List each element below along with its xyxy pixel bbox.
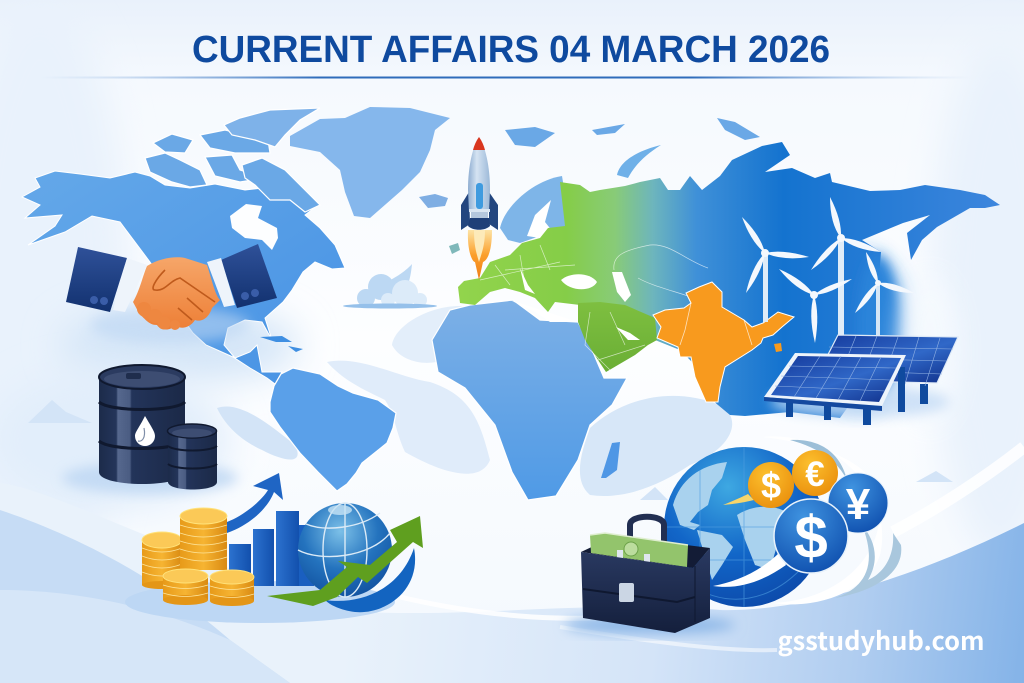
British Isles [449, 243, 460, 254]
icon: wind turbines [742, 197, 914, 343]
coin stacks [142, 508, 254, 606]
turbine middle [779, 269, 852, 343]
Novaya Zemlya [617, 145, 661, 178]
Arabia and the Middle East [578, 302, 657, 372]
bottom waves [0, 447, 1024, 683]
Eurasia [458, 142, 1000, 418]
bar chart [229, 511, 314, 586]
icon: rocket [461, 137, 498, 280]
swooshes [763, 436, 882, 604]
Africa [432, 300, 627, 500]
India region [653, 282, 794, 402]
blur seam over east Asia [858, 255, 898, 395]
dollar coin blue: $ [794, 504, 828, 571]
globe [298, 503, 415, 612]
Arctic Russia islands [505, 118, 760, 147]
Sri Lanka [774, 343, 782, 352]
turbine 2 [811, 197, 881, 335]
dollar coin orange: $ [761, 465, 781, 506]
icon: solar panels [764, 335, 958, 425]
euro coin: € [805, 455, 825, 494]
world globe [664, 447, 824, 607]
white swoosh [713, 552, 786, 587]
yen coin: ¥ [846, 480, 871, 529]
world map [22, 107, 1000, 500]
small barrel [168, 424, 217, 490]
turbine 4 [855, 252, 914, 337]
icon: coins, growth chart and globe [125, 473, 423, 623]
inner seas [510, 268, 640, 340]
green arrow [267, 516, 423, 606]
icon: handshake [66, 244, 277, 343]
icon: oil barrels [62, 365, 238, 494]
turbine 1 [742, 217, 809, 322]
North America [22, 171, 345, 384]
title: CURRENT AFFAIRS 04 MARCH 2026 [192, 29, 830, 71]
South America [270, 368, 396, 491]
Madagascar [601, 442, 620, 478]
Iceland [419, 194, 448, 208]
briefcase [565, 517, 735, 635]
Greenland [290, 107, 450, 218]
yen coin [828, 473, 888, 533]
Caribbean islands [260, 336, 303, 352]
website label: gsstudyhub.com [778, 622, 984, 658]
blurred east Asia [815, 255, 905, 405]
front panel [764, 353, 906, 425]
large barrel [99, 365, 185, 484]
title rule [40, 76, 970, 78]
cloud [343, 264, 437, 308]
icon: globe with currency coins and briefcase [565, 436, 901, 635]
rising blue arrow [227, 473, 283, 533]
dollar coin orange [748, 462, 794, 508]
country borders [480, 245, 708, 370]
Scandinavia and northern Europe [500, 176, 570, 243]
dollar coin blue [774, 499, 848, 573]
India inner borders [680, 303, 752, 345]
euro coin [792, 450, 838, 496]
fade on the right of the map [900, 275, 960, 425]
Baltic Sea [527, 200, 553, 238]
back panel [815, 335, 958, 404]
pale ocean patches [28, 306, 953, 500]
Arctic islands [145, 108, 320, 212]
Hudson Bay [230, 204, 278, 250]
